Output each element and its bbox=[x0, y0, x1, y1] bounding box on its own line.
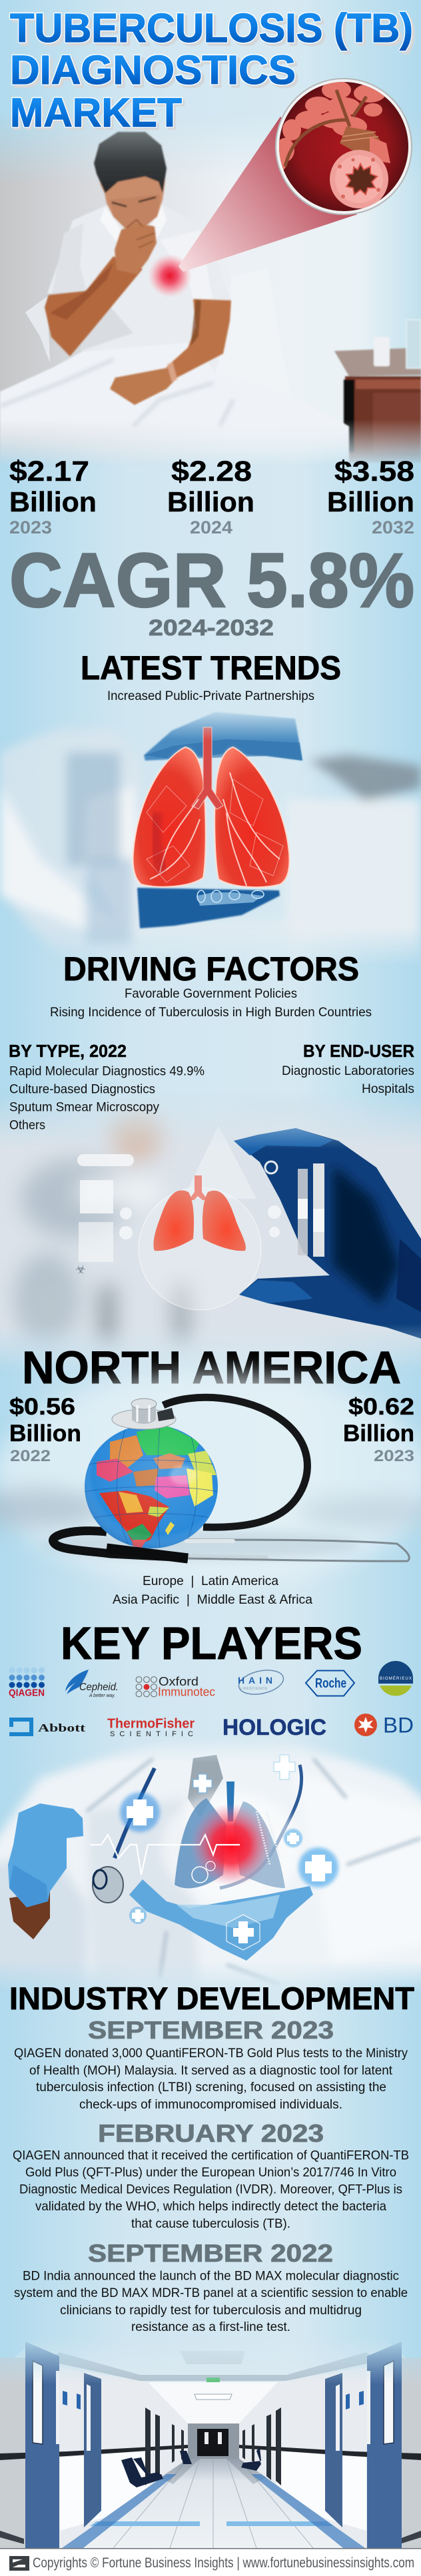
title line 3: MARKET bbox=[12, 92, 184, 137]
development: February 2023: Gold Plus (QFT-Plus) under the European Union’s 2017/746 In Vitro bbox=[25, 2165, 396, 2180]
figure 2023 bbox=[9, 456, 97, 537]
left near door bbox=[25, 2342, 59, 2548]
lung veins bbox=[150, 773, 280, 886]
development: September 2022: resistance as a first-line test. bbox=[131, 2320, 290, 2334]
regional value right: Billion bbox=[343, 1421, 414, 1447]
key players logos bbox=[9, 1661, 414, 1740]
right near door bbox=[367, 2342, 402, 2548]
test tube bars bbox=[298, 1169, 308, 1255]
logo: Oxford Immunotec: Immunotec bbox=[158, 1685, 215, 1698]
title line 2: DIAGNOSTICS bbox=[10, 47, 296, 93]
other regions bbox=[113, 1574, 312, 1607]
right wall bbox=[239, 2358, 421, 2548]
figure 2032: 2032 bbox=[372, 517, 414, 537]
figure 2024: $2.28 bbox=[171, 456, 252, 487]
figure 2023: $2.17 bbox=[9, 456, 89, 487]
glowing red lungs bbox=[133, 727, 289, 887]
title line 3: MARKET bbox=[10, 90, 182, 135]
market size figures bbox=[9, 456, 414, 537]
by end-user segment bbox=[282, 1041, 414, 1096]
footer bar bbox=[0, 2548, 421, 2576]
brown wrist bbox=[9, 1891, 50, 1939]
floor bbox=[62, 2459, 365, 2548]
logo: Thermo Fisher Scientific: SCIENTIFIC bbox=[110, 1730, 193, 1738]
panel: gloved hand holding diagnostic screen bbox=[0, 1104, 421, 1363]
logo: Roche bbox=[306, 1670, 354, 1696]
panel: doctor with hologram lungs bbox=[0, 1738, 421, 1998]
logo: BD: BD bbox=[383, 1713, 414, 1737]
red pain spot on chest bbox=[149, 255, 191, 296]
wall behind the man bbox=[0, 113, 421, 466]
logo: Hologic: HOLOGIC bbox=[222, 1715, 326, 1740]
tablet data glow left bbox=[67, 753, 120, 866]
icon: Fortune Business Insights mark bbox=[9, 2556, 29, 2571]
heading: key players: KEY PLAYERS bbox=[61, 1618, 362, 1669]
by type list: Others bbox=[9, 1118, 45, 1132]
by type list: Sputum Smear Microscopy bbox=[9, 1100, 159, 1115]
exit sign bbox=[207, 2378, 220, 2382]
organ icons on glove bbox=[197, 890, 264, 902]
blue gloved hand bbox=[234, 1128, 421, 1339]
Europe bbox=[110, 1435, 143, 1468]
logo: Cepheid bbox=[65, 1670, 119, 1698]
medical cross badges bbox=[120, 1755, 338, 1950]
figure 2023: Billion bbox=[9, 486, 97, 517]
logo: Oxford Immunotec: Oxford bbox=[159, 1675, 199, 1688]
development: September 2022: BD India announced the launch of the BD MAX molecular diagnostic bbox=[23, 2268, 399, 2283]
white coat bbox=[0, 1738, 421, 1998]
doctor's coat bbox=[0, 726, 421, 972]
development: February 2023 bbox=[13, 2120, 409, 2231]
logo: Thermo Fisher Scientific: ThermoFisher bbox=[107, 1717, 195, 1732]
title line 1: TUBERCULOSIS (TB) bbox=[10, 5, 413, 51]
development: September 2022 bbox=[14, 2240, 408, 2334]
Middle East and South Asia bbox=[133, 1468, 159, 1486]
development: February 2023: FEBRUARY 2023 bbox=[98, 2120, 324, 2147]
bronchi blobs bbox=[273, 81, 386, 171]
logo: Hain Lifescience: LIFESCIENCE bbox=[240, 1687, 268, 1691]
screen ring bbox=[139, 1187, 261, 1310]
blue gloved fist bbox=[8, 1803, 83, 1907]
lower blue glove bbox=[137, 888, 280, 928]
logo: QIAGEN bbox=[9, 1668, 45, 1698]
right second door bbox=[325, 2373, 342, 2527]
development: September 2023: of Health (MOH) Malaysia. It served as a diagnostic tool for latent bbox=[29, 2063, 393, 2078]
CAGR headline: CAGR 5.8% bbox=[9, 538, 414, 623]
development: September 2023: tuberculosis infection (LTBI) screning, focused on assisting the bbox=[36, 2080, 386, 2094]
head with hair bbox=[94, 132, 167, 230]
regional value left: Billion bbox=[9, 1421, 81, 1447]
man's torso in white t-shirt bbox=[47, 205, 210, 350]
hologram lungs bbox=[90, 1781, 301, 1905]
logo: Roche: Roche bbox=[315, 1676, 346, 1691]
development: September 2023 bbox=[14, 2017, 408, 2112]
figure 2032: Billion bbox=[327, 486, 414, 517]
figure 2023: 2023 bbox=[9, 517, 52, 537]
table shadow bbox=[0, 1490, 107, 1527]
trachea bbox=[192, 727, 223, 809]
star-shaped lumen bbox=[346, 164, 377, 194]
panel: hospital corridor bbox=[0, 2334, 421, 2548]
corridor ceiling bbox=[0, 2334, 421, 2382]
stethoscope bbox=[93, 1765, 302, 1903]
by type segment bbox=[9, 1041, 205, 1132]
waiting chairs right bbox=[241, 2447, 261, 2471]
man's right arm and hand bbox=[110, 299, 231, 405]
right far doors bbox=[242, 2408, 281, 2485]
title line 1: TUBERCULOSIS (TB) bbox=[13, 8, 416, 53]
logo: Hain Lifescience: HAIN bbox=[238, 1675, 272, 1686]
metal ear tubes bbox=[187, 1540, 409, 1561]
tube front piece bbox=[107, 1548, 188, 1558]
tie bbox=[188, 1755, 223, 1818]
title bbox=[10, 5, 416, 137]
other regions: Europe | Latin America bbox=[143, 1574, 278, 1588]
logo: Thermo Fisher Scientific bbox=[107, 1717, 195, 1738]
heading: latest trends: LATEST TRENDS bbox=[81, 649, 341, 687]
bedside table bbox=[334, 320, 421, 463]
by end-user list: Hospitals bbox=[362, 1082, 414, 1096]
Arctic and Russia bbox=[137, 1425, 200, 1455]
by type list: Rapid Molecular Diagnostics 49.9% bbox=[9, 1064, 205, 1079]
by end-user list: Diagnostic Laboratories bbox=[282, 1064, 414, 1078]
biohazard marks: ☣ bbox=[75, 1263, 86, 1277]
Africa bbox=[99, 1490, 169, 1546]
development: September 2022: clinicians to rapidly test for tuberculosis and multidrug bbox=[60, 2303, 362, 2318]
logo: Oxford Immunotec bbox=[136, 1675, 215, 1698]
by end-user list bbox=[282, 1064, 414, 1096]
open gloved hand bbox=[129, 1879, 313, 1961]
logo: Abbott bbox=[9, 1718, 85, 1736]
logo: bioMérieux bbox=[378, 1661, 413, 1696]
driving factors text: Rising Incidence of Tuberculosis in High Burden Countries bbox=[50, 1005, 372, 1020]
development: September 2022: system and the BD MAX MDR-TB panel at a scientific session to enable bbox=[14, 2286, 408, 2300]
figure 2032 bbox=[327, 456, 414, 537]
left far doors bbox=[145, 2408, 184, 2485]
pillow behind the man bbox=[25, 296, 50, 363]
title line 3: MARKET bbox=[10, 90, 182, 135]
panel: doctor's gloves holding glowing lungs bbox=[0, 712, 421, 972]
magnification cone bbox=[179, 117, 357, 272]
by type list bbox=[9, 1064, 205, 1132]
figure 2024 bbox=[167, 456, 254, 537]
logo: Cepheid: A better way. bbox=[89, 1694, 115, 1698]
pale surface glow bbox=[0, 1372, 421, 1585]
development: February 2023: that cause tuberculosis (TB). bbox=[131, 2216, 290, 2231]
development: September 2023: check-ups of immunocompromised individuals. bbox=[79, 2097, 342, 2112]
regional value right: $0.62 bbox=[348, 1394, 414, 1420]
heading: driving factors: DRIVING FACTORS bbox=[63, 950, 359, 988]
figure 2032: $3.58 bbox=[334, 456, 414, 487]
pillow on right bbox=[200, 269, 346, 426]
logo: BD bbox=[354, 1713, 414, 1737]
left wall bbox=[0, 2358, 188, 2548]
bronchus cross-section bbox=[330, 150, 388, 208]
blue gloved hand: ☣ bbox=[308, 1265, 318, 1279]
other regions: Asia Pacific | Middle East & Africa bbox=[113, 1592, 312, 1607]
stethoscope tube back loop bbox=[163, 1397, 307, 1527]
heading: industry development: INDUSTRY DEVELOPMENT bbox=[9, 1981, 414, 2016]
title line 1: TUBERCULOSIS (TB) bbox=[10, 5, 413, 51]
water glass bbox=[406, 320, 421, 368]
holographic screen: white blocks bbox=[77, 1154, 281, 1262]
ECG line bbox=[90, 1835, 240, 1875]
heading: north america: NORTH AMERICA bbox=[22, 1342, 401, 1393]
globe with stethoscope bbox=[0, 1372, 421, 1585]
title line 2: DIAGNOSTICS bbox=[10, 47, 296, 93]
hero scene with fade at bottom bbox=[0, 79, 421, 466]
by type heading: BY TYPE, 2022 bbox=[9, 1041, 127, 1061]
man's left arm raised to mouth bbox=[45, 220, 157, 356]
logo: Cepheid: Cepheid. bbox=[79, 1682, 119, 1693]
development: February 2023: QIAGEN announced that it received the certification of QuantiFERON-TB bbox=[13, 2148, 409, 2163]
logo: bioMérieux: BIOMÉRIEUX bbox=[380, 1676, 412, 1681]
blanket bbox=[0, 342, 349, 466]
regional value right: 2023 bbox=[374, 1447, 414, 1465]
development: September 2022: SEPTEMBER 2022 bbox=[88, 2240, 333, 2267]
logo: Abbott: Abbott bbox=[38, 1722, 85, 1734]
development: September 2023: SEPTEMBER 2023 bbox=[88, 2017, 334, 2044]
driving factors text: Favorable Government Policies bbox=[125, 986, 297, 1001]
logo: Hain Lifescience bbox=[236, 1666, 286, 1698]
regional value left: $0.56 bbox=[9, 1394, 75, 1420]
waiting chairs left bbox=[121, 2451, 192, 2487]
left second door bbox=[84, 2373, 101, 2527]
regional value right bbox=[343, 1394, 414, 1465]
handrails bbox=[0, 2445, 188, 2460]
title line 2: DIAGNOSTICS bbox=[13, 50, 298, 95]
latest trends text: Increased Public-Private Partnerships bbox=[107, 689, 314, 703]
development: February 2023: Diagnostic Medical Devices Regulation (IVDR). Moreover, QFT-Plus is bbox=[19, 2182, 402, 2196]
figure 2024: Billion bbox=[167, 486, 254, 517]
lung tissue close-up circle bbox=[273, 79, 412, 214]
latitude lines bbox=[85, 1425, 218, 1548]
small coral lungs bbox=[153, 1175, 246, 1251]
earth globe bbox=[85, 1425, 218, 1548]
end wall with dark doors bbox=[188, 2423, 239, 2461]
upper blue glove bbox=[144, 712, 302, 761]
hero panel: coughing man with lung close-up bbox=[0, 79, 421, 466]
lung mesh bbox=[147, 779, 283, 882]
stethoscope chest piece bbox=[112, 1399, 176, 1429]
blurred lab backdrop bbox=[0, 1104, 421, 1363]
development: February 2023: validated by the WHO, which helps indirectly detect the bacteria bbox=[35, 2199, 386, 2214]
regional value left bbox=[9, 1394, 81, 1465]
driving factors text bbox=[50, 986, 372, 1020]
pill bottle bbox=[374, 337, 390, 366]
logo: QIAGEN: QIAGEN bbox=[9, 1688, 45, 1698]
by type list: Culture-based Diagnostics bbox=[9, 1082, 155, 1096]
CAGR period: 2024-2032 bbox=[149, 615, 274, 641]
regional value left: 2022 bbox=[10, 1447, 51, 1465]
by end-user heading: BY END-USER bbox=[303, 1041, 414, 1061]
coat shadow folds bbox=[87, 1758, 421, 1985]
wall signs bbox=[63, 2391, 364, 2410]
figure 2024: 2024 bbox=[190, 517, 232, 537]
